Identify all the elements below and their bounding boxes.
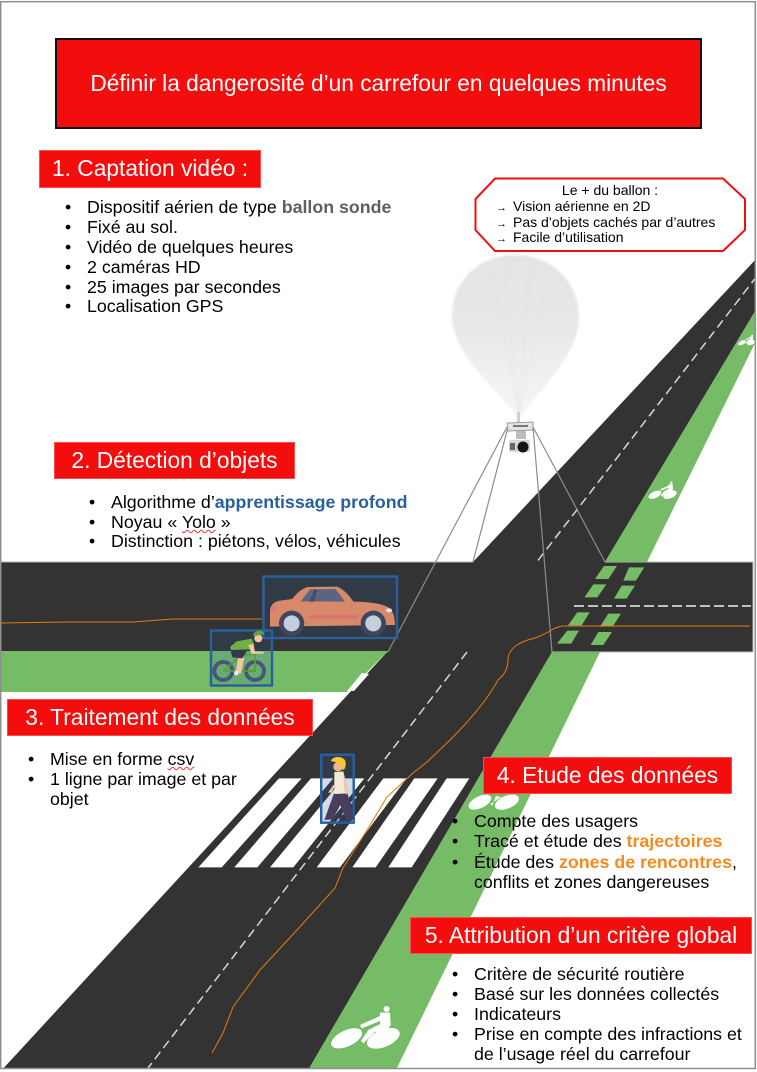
text block: section 1: • <box>65 237 71 257</box>
cycle lane west <box>0 651 388 692</box>
text block: section 3: Mise en forme csv <box>50 749 194 769</box>
road edge lines <box>1 562 473 563</box>
text block: section 1: • <box>65 217 71 237</box>
callout: balloon advantages: Le + du ballon : <box>562 182 658 198</box>
text block: section 3: 1 ligne par image et par <box>50 769 237 789</box>
heading: section 1: 1. Captation vidéo : <box>52 155 248 181</box>
callout: balloon advantages: Pas d’objets cachés par d’autres <box>513 214 715 230</box>
callout: balloon advantages <box>474 178 746 252</box>
road surface <box>0 258 757 1072</box>
icon: bike marking top right <box>738 334 755 346</box>
centre line dashes south <box>148 652 467 1068</box>
car detection <box>264 576 397 638</box>
pedestrian detection <box>321 755 354 823</box>
callout: balloon advantages: Vision aérienne en 2D <box>513 198 651 214</box>
text block: section 5: de l’usage réel du carrefour <box>474 1044 690 1064</box>
text block: section 5: • <box>452 964 458 984</box>
text block: section 4: • <box>452 831 458 851</box>
text block: section 2: Distinction : piétons, vélos, véhicules <box>111 531 401 551</box>
trajectory: car <box>0 619 262 623</box>
text block: section 5: • <box>452 1024 458 1044</box>
heading: section 5 <box>410 917 752 954</box>
road edge lines right <box>552 562 753 652</box>
text block: section 2: Noyau « Yolo » <box>111 512 231 532</box>
centre line dashes east <box>574 605 751 607</box>
text block: section 1: • <box>65 197 71 217</box>
text block: section 1: 2 caméras HD <box>87 257 201 277</box>
heading: section 4: 4. Etude des données <box>497 762 718 788</box>
text block: section 3: • <box>28 769 34 789</box>
text block: section 4: • <box>452 852 458 872</box>
text block: section 4: conflits et zones dangereuses <box>474 872 709 892</box>
heading: section 5: 5. Attribution d’un critère global <box>425 922 737 948</box>
heading: section 3 <box>7 699 313 736</box>
text block: section 5: Prise en compte des infractions et <box>474 1024 742 1044</box>
text block: section 4: Étude des zones de rencontres, <box>474 852 737 872</box>
text block: section 1: Dispositif aérien de type ballon sonde <box>87 197 391 217</box>
text block: section 2 <box>89 492 407 551</box>
text block: section 2: • <box>89 492 95 512</box>
text block: section 2: • <box>89 512 95 532</box>
text block: section 5 <box>452 964 742 1064</box>
centre line dashes north <box>536 276 757 563</box>
text block: section 5: Critère de sécurité routière <box>474 964 685 984</box>
cycle lane north <box>605 308 757 562</box>
text block: section 3: • <box>28 749 34 769</box>
heading: section 4 <box>483 757 732 794</box>
icon: bike marking north lane <box>648 482 677 499</box>
text block: section 1 <box>65 197 391 316</box>
text block: section 4: Compte des usagers <box>474 811 638 831</box>
cycle crossing squares <box>557 566 644 645</box>
text block: section 5: • <box>452 1004 458 1024</box>
heading: section 1 <box>39 150 261 188</box>
text block: section 1: • <box>65 277 71 297</box>
text block: section 1: Localisation GPS <box>87 296 223 316</box>
text block: section 2: Algorithme d’apprentissage profond <box>111 492 407 512</box>
cyclist detection <box>211 630 272 686</box>
heading: section 3: 3. Traitement des données <box>25 704 295 730</box>
balloon <box>452 255 579 420</box>
heading: section 2: 2. Détection d’objets <box>71 447 278 473</box>
tether lines <box>388 427 605 652</box>
pedestrian crossing <box>198 778 469 867</box>
trajectory: cyclist <box>212 626 750 1053</box>
icon: bike marking partly hidden <box>468 794 519 810</box>
heading: section 2 <box>54 442 295 479</box>
text block: section 1: • <box>65 296 71 316</box>
text block: section 1: • <box>65 257 71 277</box>
text block: section 4 <box>452 811 737 892</box>
callout: balloon advantages: → <box>496 218 507 230</box>
cycle lane south <box>307 652 600 1072</box>
title: Définir la dangerosité d’un carrefour en quelques minutes <box>90 70 667 96</box>
text block: section 1: Fixé au sol. <box>87 217 178 237</box>
text block: section 5: Indicateurs <box>474 1004 561 1024</box>
text block: section 5: • <box>452 984 458 1004</box>
lane stop mark <box>347 673 369 691</box>
title <box>55 38 702 129</box>
text block: section 1: Vidéo de quelques heures <box>87 237 293 257</box>
text block: section 5: Basé sur les données collectés <box>474 984 719 1004</box>
icon: bike marking south lane <box>331 1006 400 1049</box>
text block: section 1: 25 images par secondes <box>87 277 281 297</box>
text block: section 4: • <box>452 811 458 831</box>
callout: balloon advantages: → <box>496 233 507 245</box>
text block: section 3: objet <box>50 789 89 809</box>
callout: balloon advantages: → <box>496 202 507 214</box>
gondola and camera <box>507 412 533 452</box>
text block: section 2: • <box>89 531 95 551</box>
text block: section 4: Tracé et étude des trajectoires <box>474 831 722 851</box>
callout: balloon advantages: Facile d’utilisation <box>513 229 624 245</box>
text block: section 3 <box>28 749 237 809</box>
